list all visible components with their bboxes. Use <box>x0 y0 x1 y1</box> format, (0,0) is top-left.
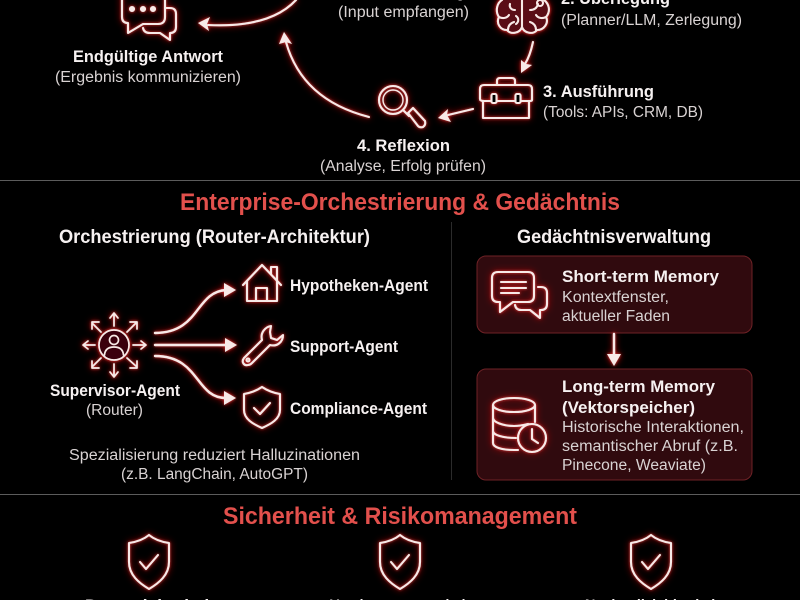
icon: shield 2 <box>380 535 420 589</box>
text: supervisor agent: Supervisor-Agent <box>50 382 180 400</box>
text: step 4 <box>320 137 486 175</box>
panel: short-term memory <box>477 256 752 333</box>
text: short-term memory: aktueller Faden <box>562 308 670 325</box>
panel: long-term memory <box>477 369 752 480</box>
icon: wrench <box>243 326 283 365</box>
icon: toolbox <box>480 78 532 118</box>
icon: supervisor agent <box>83 313 146 377</box>
text: short-term memory: Kontextfenster, <box>562 289 669 306</box>
label: mortgage agent: Hypotheken-Agent <box>290 277 428 295</box>
icon: house <box>243 265 281 301</box>
icon: magnifier <box>379 86 425 127</box>
text: specialization note: (z.B. LangChain, AutoGPT) <box>121 466 308 483</box>
text: final answer <box>55 48 241 86</box>
text: long-term memory: Historische Interaktionen, <box>562 419 744 436</box>
text: step 2 <box>561 0 742 29</box>
text: long-term memory: semantischer Abruf (z.B. <box>562 438 738 455</box>
arrow: brain to toolbox <box>521 42 533 73</box>
icon: shield 3 <box>631 535 671 589</box>
text: long-term memory <box>562 378 744 474</box>
icon: database with clock <box>493 398 546 452</box>
text: supervisor agent <box>50 382 180 419</box>
arrow: reflection back to input <box>279 32 369 117</box>
text: specialization note: Spezialisierung reduziert Halluzinationen <box>69 447 360 464</box>
text: short-term memory: Short-term Memory <box>562 268 720 286</box>
text: step 4: (Analyse, Erfolg prüfen) <box>320 158 486 175</box>
arrow: router to support agent <box>155 338 237 352</box>
text: long-term memory: Long-term Memory <box>562 378 716 396</box>
icon: compliance shield <box>244 387 280 428</box>
text: step 4: 4. Reflexion <box>357 137 450 155</box>
arrow: short-term to long-term <box>607 334 621 366</box>
icon: shield 1 <box>129 535 169 589</box>
arrow: router to mortgage agent <box>155 283 236 333</box>
text: final answer: Endgültige Antwort <box>73 48 223 66</box>
arrow: toolbox to reflection <box>438 109 473 122</box>
text: specialization note <box>69 447 360 483</box>
arrow: router to compliance agent <box>155 356 236 405</box>
text: step 2: (Planner/LLM, Zerlegung) <box>561 12 742 29</box>
text: step 3 <box>543 83 703 121</box>
section heading: orchestration and memory: Enterprise-Orchestrierung & Gedächtnis <box>180 189 620 216</box>
text: final answer: (Ergebnis kommunizieren) <box>55 69 241 86</box>
text: step 1: (Input empfangen) <box>338 4 469 21</box>
label: compliance agent: Compliance-Agent <box>290 400 427 418</box>
text: supervisor agent: (Router) <box>86 402 143 419</box>
icon: brain <box>497 0 549 33</box>
arrow: to final answer <box>198 0 296 31</box>
section heading: security and risk: Sicherheit & Risikomanagement <box>223 503 577 530</box>
text: step 3: 3. Ausführung <box>543 83 654 101</box>
text: short-term memory <box>562 268 720 325</box>
icon: final answer chat bubbles <box>122 0 176 40</box>
label: support agent: Support-Agent <box>290 338 398 356</box>
subheading: orchestration: Orchestrierung (Router-Architektur) <box>59 227 370 248</box>
icon: memo chat bubbles <box>492 272 547 318</box>
text: step 3: (Tools: APIs, CRM, DB) <box>543 104 703 121</box>
text: long-term memory: (Vektorspeicher) <box>562 399 695 417</box>
subheading: memory management: Gedächtnisverwaltung <box>517 227 711 248</box>
text: long-term memory: Pinecone, Weaviate) <box>562 457 706 474</box>
